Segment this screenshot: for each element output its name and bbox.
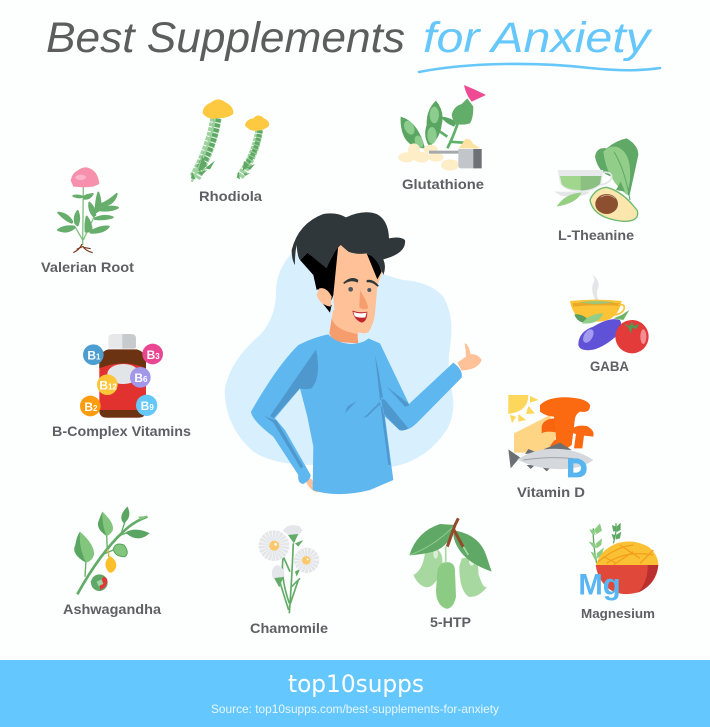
icon: Glutathione: [398, 85, 486, 171]
icon: GABA: [570, 274, 649, 353]
icon: B-Complex Vitamins: [80, 334, 163, 418]
icon: B-Complex Vitamins: B3: [147, 348, 160, 362]
icon: B-Complex Vitamins: B6: [134, 371, 148, 385]
icon: Valerian Root: [58, 167, 118, 253]
icon: Magnesium: Mg: [578, 569, 621, 602]
label: Vitamin D: Vitamin D: [517, 484, 585, 500]
face: [333, 243, 383, 333]
title: for Anxiety: [423, 14, 653, 62]
illustration: man giving thumbs up: [225, 212, 482, 494]
label: 5-HTP: 5-HTP: [430, 614, 471, 630]
icon: B-Complex Vitamins: B1: [87, 348, 101, 362]
label: Valerian Root: Valerian Root: [41, 259, 134, 275]
label: Chamomile: Chamomile: [250, 620, 328, 636]
shirt shading: [264, 349, 409, 469]
icon: B-Complex Vitamins: B2: [84, 400, 98, 414]
neck: [330, 310, 362, 342]
background blob: [225, 253, 453, 467]
hair: [292, 212, 405, 275]
shirt: [251, 334, 462, 494]
label: B-Complex Vitamins: B-Complex Vitamins: [52, 423, 191, 439]
icon: Chamomile: [259, 525, 319, 613]
ear: [317, 288, 332, 307]
label: Ashwagandha: Ashwagandha: [63, 601, 161, 617]
label: Magnesium: Magnesium: [581, 606, 655, 621]
icon: B-Complex Vitamins: B12: [99, 378, 117, 392]
icon: L-Theanine: [554, 138, 638, 221]
icon: Vitamin D: [508, 395, 594, 477]
icon: 5-HTP: [409, 518, 492, 609]
icon: Ashwagandha: [74, 507, 149, 594]
source line: Source: top10supps.com/best-supplements-for-anxiety: [211, 702, 499, 716]
hand on hip: [306, 478, 323, 493]
icon: Magnesium: [578, 523, 658, 602]
label: Rhodiola: Rhodiola: [199, 188, 262, 204]
title: Best Supplements: [46, 14, 405, 62]
footer band: [0, 660, 710, 727]
title underline: [419, 64, 660, 72]
mouth: [352, 311, 367, 323]
label: Glutathione: Glutathione: [402, 176, 484, 192]
thumb-up hand: [457, 343, 482, 371]
icon: B-Complex Vitamins: B9: [141, 399, 154, 413]
label: L-Theanine: L-Theanine: [558, 227, 634, 243]
under hair: [300, 245, 382, 313]
title: [46, 14, 653, 62]
icon: Rhodiola: [191, 99, 269, 182]
brand name: top10supps: [288, 670, 424, 698]
label: GABA: GABA: [590, 358, 629, 374]
eyebrows: [343, 278, 379, 287]
nose: [359, 291, 368, 309]
eyes: [348, 287, 353, 292]
